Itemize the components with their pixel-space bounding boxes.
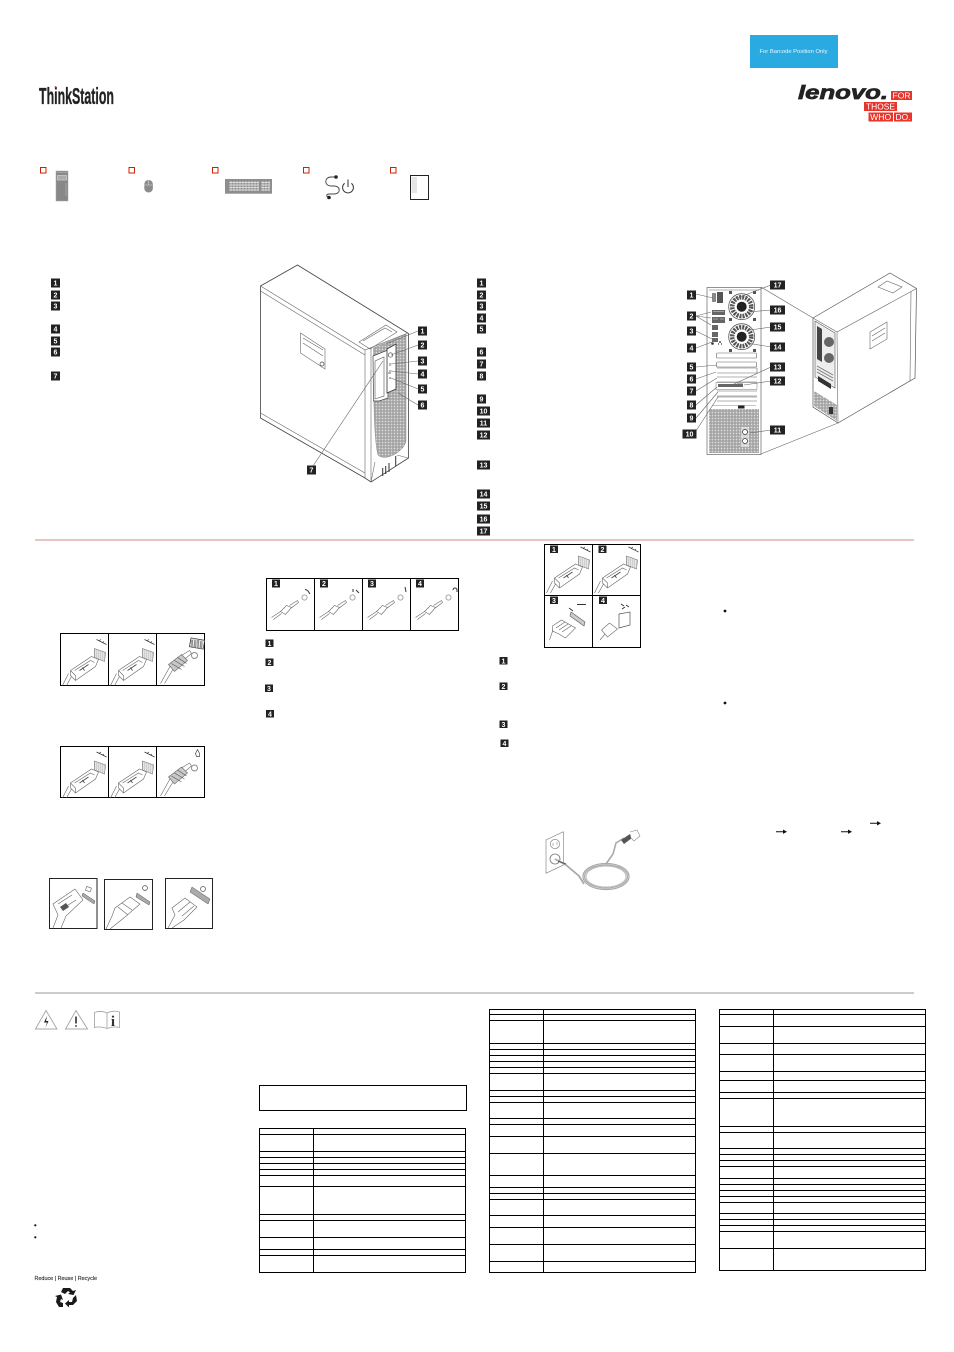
callouts: rear numbers: 8 bbox=[690, 403, 694, 410]
logo: ThinkStation: ThinkStation bbox=[39, 83, 114, 109]
panel: USB, serial and Ethernet connectors: 3 bbox=[552, 598, 556, 605]
side tower bbox=[761, 273, 916, 454]
callouts: rear numbers: 7 bbox=[690, 389, 694, 396]
list: rear view number badges: 7 bbox=[480, 362, 484, 369]
logo: Lenovo For Those Who Do: WHO bbox=[870, 113, 891, 122]
list: rear view number badges: 8 bbox=[480, 374, 484, 381]
list: rear view number badges: 15 bbox=[480, 504, 487, 511]
list: rear view number badges: 13 bbox=[480, 463, 487, 470]
panel: keyboard connectors bbox=[60, 634, 205, 686]
bullet bbox=[34, 1236, 36, 1238]
list: rear view number badges: 2 bbox=[480, 293, 484, 300]
list: rear view number badges bbox=[477, 278, 490, 536]
panel: audio connectors bbox=[266, 578, 458, 630]
bullet bbox=[724, 610, 726, 612]
panel: audio connectors: 1 bbox=[274, 581, 278, 588]
list: audio connector numbers: 4 bbox=[268, 711, 272, 718]
icon: electrical hazard bbox=[36, 1010, 57, 1029]
bullet bbox=[34, 1224, 36, 1226]
list: rear view number badges: 6 bbox=[480, 350, 484, 357]
callouts: rear numbers: 1 bbox=[690, 293, 694, 300]
HDMI/DP connector bbox=[104, 880, 152, 930]
DVI connector bbox=[166, 878, 212, 928]
callouts: rear numbers: 9 bbox=[690, 416, 694, 423]
list: rear view number badges: 3 bbox=[480, 304, 484, 311]
list: front view number badges: 7 bbox=[54, 374, 58, 381]
heading: Reduce Reuse Recycle: Reduce | Reuse | Recycle bbox=[34, 1276, 97, 1282]
divider: gray section rule bbox=[35, 992, 914, 994]
VGA connector bbox=[50, 878, 97, 928]
callouts: rear numbers: 17 bbox=[774, 283, 781, 290]
icon: keyboard bbox=[225, 179, 272, 194]
list: connector numbers: 3 bbox=[502, 722, 506, 729]
list: rear view number badges: 17 bbox=[480, 529, 487, 536]
diagram: computer rear view bbox=[682, 273, 916, 454]
logo: Lenovo For Those Who Do bbox=[798, 83, 912, 122]
list: rear view number badges: 12 bbox=[480, 433, 487, 440]
callouts: front numbers: 1 bbox=[421, 329, 425, 336]
icon: document bbox=[410, 176, 428, 200]
panel: video connectors bbox=[50, 878, 212, 930]
barcode placeholder bbox=[750, 35, 838, 68]
list: rear view number badges: 1 bbox=[480, 281, 484, 288]
icon: caution bbox=[66, 1010, 88, 1029]
callouts: rear numbers: 15 bbox=[774, 325, 781, 332]
callouts: front numbers: 4 bbox=[421, 372, 425, 379]
panel: USB, serial and Ethernet connectors: 2 bbox=[601, 547, 605, 554]
icon: mouse bbox=[144, 180, 153, 192]
list: rear view number badges: 11 bbox=[480, 421, 487, 428]
callout box bbox=[260, 1086, 466, 1110]
icon: power cord and power symbol bbox=[326, 175, 353, 199]
callouts: front numbers bbox=[307, 326, 427, 475]
callouts: rear numbers: 14 bbox=[774, 345, 781, 352]
callouts: rear numbers: 13 bbox=[774, 365, 781, 372]
panel: mouse connectors bbox=[60, 746, 204, 798]
callouts: front numbers: 2 bbox=[421, 343, 425, 350]
list: rear view number badges: 16 bbox=[480, 517, 487, 524]
list: front view number badges: 4 bbox=[54, 327, 58, 334]
callouts: rear numbers: 4 bbox=[690, 346, 694, 353]
logo: Lenovo For Those Who Do: FOR bbox=[892, 92, 911, 101]
table: specifications part 3 bbox=[720, 1010, 926, 1270]
logo: Lenovo For Those Who Do: DO. bbox=[896, 113, 910, 122]
list: front view number badges: 6 bbox=[54, 350, 58, 357]
callouts: front numbers: 3 bbox=[421, 359, 425, 366]
table: specifications part 1 bbox=[260, 1128, 466, 1272]
panel: USB, serial and Ethernet connectors: 4 bbox=[601, 598, 605, 605]
callouts: rear numbers bbox=[682, 280, 785, 439]
list: connector numbers: 4 bbox=[503, 741, 507, 748]
rear panel enlargement bbox=[707, 288, 761, 454]
checkbox: publication bbox=[390, 168, 396, 173]
callouts: rear numbers: 6 bbox=[690, 377, 694, 384]
arrow bbox=[776, 830, 787, 834]
list: connector numbers: 1 bbox=[502, 658, 506, 665]
list: front view number badges: 2 bbox=[54, 293, 58, 300]
callouts: rear numbers: 12 bbox=[774, 379, 781, 386]
checkbox: keyboard bbox=[212, 168, 218, 173]
list: audio connector numbers: 3 bbox=[267, 686, 271, 693]
checkbox: mouse bbox=[129, 168, 134, 173]
panel: USB, serial and Ethernet connectors bbox=[544, 544, 640, 648]
bullet bbox=[724, 702, 726, 704]
list: front view number badges: 1 bbox=[54, 281, 58, 288]
callouts: rear numbers: 11 bbox=[774, 428, 781, 435]
panel: USB, serial and Ethernet connectors: 1 bbox=[552, 547, 556, 554]
illustration: power cord and outlet bbox=[546, 830, 640, 890]
list: connector numbers bbox=[500, 657, 508, 748]
panel: audio connectors: 2 bbox=[322, 581, 326, 588]
checkbox: cables bbox=[304, 168, 309, 173]
list: audio connector numbers: 1 bbox=[268, 641, 272, 648]
arrow bbox=[841, 830, 852, 834]
arrow bbox=[870, 821, 881, 826]
list: rear view number badges: 9 bbox=[480, 397, 484, 404]
callouts: rear numbers: 16 bbox=[774, 308, 781, 315]
logo: Lenovo For Those Who Do: THOSE bbox=[866, 103, 895, 112]
list: rear view number badges: 14 bbox=[480, 492, 487, 499]
icon: information book: i bbox=[111, 1014, 115, 1030]
icon: information book bbox=[94, 1011, 120, 1030]
barcode placeholder: For Barcode Position Only bbox=[760, 49, 828, 55]
list: connector numbers: 2 bbox=[502, 684, 506, 691]
logo: ThinkStation bbox=[39, 83, 114, 109]
callouts: rear numbers: 3 bbox=[690, 329, 694, 336]
list: audio connector numbers bbox=[265, 640, 274, 718]
callouts: front numbers: 5 bbox=[421, 387, 425, 394]
panel: audio connectors: 4 bbox=[418, 581, 422, 588]
icon: recycle symbol bbox=[55, 1288, 77, 1308]
list: rear view number badges: 5 bbox=[480, 327, 484, 334]
checkbox: computer bbox=[40, 168, 46, 173]
icon: computer tower bbox=[56, 171, 68, 201]
diagram: computer front view bbox=[260, 265, 427, 482]
table: specifications part 2 bbox=[490, 1010, 696, 1272]
checklist: items in the box bbox=[40, 168, 428, 201]
list: front view number badges: 5 bbox=[54, 339, 58, 346]
panel: audio connectors: 3 bbox=[370, 581, 374, 588]
callouts: rear numbers: 2 bbox=[690, 314, 694, 321]
logo: Lenovo For Those Who Do: lenovo. bbox=[798, 83, 888, 104]
callouts: rear numbers: 5 bbox=[690, 365, 694, 372]
list: audio connector numbers: 2 bbox=[268, 660, 272, 667]
callouts: rear numbers: 10 bbox=[686, 432, 693, 439]
list: front view number badges: 3 bbox=[54, 304, 58, 311]
divider: red section rule bbox=[35, 540, 914, 541]
callouts: front numbers: 6 bbox=[421, 403, 425, 410]
callouts: front numbers: 7 bbox=[310, 468, 314, 475]
list: front view number badges bbox=[51, 278, 60, 381]
list: rear view number badges: 4 bbox=[480, 316, 484, 323]
list: rear view number badges: 10 bbox=[480, 409, 487, 416]
